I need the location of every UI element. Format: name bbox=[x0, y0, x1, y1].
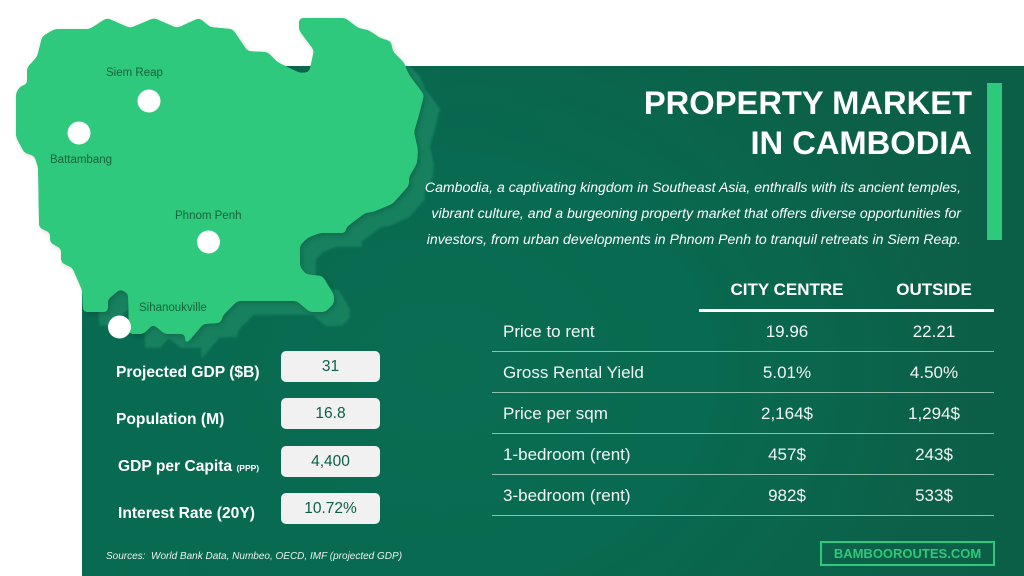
row: Price to rent: Price to rent bbox=[503, 322, 595, 341]
title: IN CAMBODIA bbox=[750, 124, 972, 161]
website badge: BAMBOOROUTES.COM bbox=[834, 546, 981, 561]
row: Price per sqm bbox=[492, 403, 994, 434]
row: 3-bedroom: 3-bedroom (rent) bbox=[503, 486, 631, 505]
row: Gross Rental Yield: 5.01% bbox=[763, 363, 811, 382]
label: Population: Population (M) bbox=[116, 411, 224, 428]
row: Gross Rental Yield: Gross Rental Yield bbox=[503, 363, 644, 382]
country shape bbox=[17, 19, 423, 343]
row: Price per sqm: Price per sqm bbox=[503, 404, 608, 423]
value: GDP per Capita: 4,400 bbox=[311, 453, 350, 470]
row: Price per sqm: 2,164$ bbox=[761, 404, 813, 423]
intro text: vibrant culture, and a burgeoning property market that offers diverse opportunities for bbox=[431, 205, 961, 221]
value: Population: 16.8 bbox=[315, 405, 346, 422]
label: Projected GDP: Projected GDP ($B) bbox=[116, 364, 260, 381]
column header: Outside: OUTSIDE bbox=[896, 280, 972, 299]
city label: Phnom Penh: Phnom Penh bbox=[175, 210, 242, 222]
value: Projected GDP bbox=[281, 351, 380, 382]
column header: City Centre: CITY CENTRE bbox=[730, 280, 844, 299]
value: Interest Rate bbox=[281, 493, 380, 524]
key figures bbox=[116, 351, 380, 524]
row: Price per sqm: 1,294$ bbox=[908, 404, 960, 423]
intro text: Cambodia, a captivating kingdom in Southeast Asia, enthralls with its ancient temples, bbox=[425, 179, 961, 195]
city label: Siem Reap: Siem Reap bbox=[106, 67, 163, 79]
value: Interest Rate: 10.72% bbox=[304, 500, 357, 517]
row: 3-bedroom: 533$ bbox=[915, 486, 953, 505]
intro text: investors, from urban developments in Phnom Penh to tranquil retreats in Siem Reap. bbox=[427, 231, 961, 247]
website badge bbox=[820, 541, 995, 566]
row: Price to rent: 22.21 bbox=[913, 322, 955, 341]
city label: Battambang: Battambang bbox=[50, 154, 112, 166]
row: Price to rent bbox=[492, 321, 994, 352]
row: 3-bedroom bbox=[492, 485, 994, 516]
property table bbox=[492, 280, 994, 516]
label: GDP per Capita: GDP per Capita (PPP) bbox=[118, 458, 259, 475]
Phnom Penh marker bbox=[197, 230, 220, 254]
city label: Sihanoukville: Sihanoukville bbox=[139, 302, 207, 314]
Battambang marker bbox=[68, 122, 90, 144]
title bbox=[644, 84, 972, 161]
intro text bbox=[425, 179, 962, 247]
row: Price to rent: 19.96 bbox=[766, 322, 808, 341]
map of Cambodia bbox=[16, 18, 440, 358]
map shadow layers bbox=[19, 21, 439, 357]
row: Gross Rental Yield: 4.50% bbox=[910, 363, 958, 382]
row: 1-bedroom bbox=[492, 444, 994, 475]
label: Interest Rate: Interest Rate (20Y) bbox=[118, 505, 255, 522]
sources note: Sources: World Bank Data, Numbeo, OECD, IMF (projected GDP) bbox=[106, 551, 402, 562]
green accent bar bbox=[987, 83, 1002, 240]
row: 1-bedroom: 243$ bbox=[915, 445, 953, 464]
row: 1-bedroom: 1-bedroom (rent) bbox=[503, 445, 631, 464]
value: Population bbox=[281, 398, 380, 429]
row: Gross Rental Yield bbox=[492, 362, 994, 393]
row: 3-bedroom: 982$ bbox=[768, 486, 806, 505]
row: 1-bedroom: 457$ bbox=[768, 445, 806, 464]
Siem Reap marker bbox=[138, 90, 160, 112]
value: GDP per Capita bbox=[281, 446, 380, 477]
header rule bbox=[699, 309, 994, 312]
title: PROPERTY MARKET bbox=[644, 84, 972, 121]
value: Projected GDP: 31 bbox=[322, 358, 339, 375]
Sihanoukville marker bbox=[108, 316, 131, 338]
